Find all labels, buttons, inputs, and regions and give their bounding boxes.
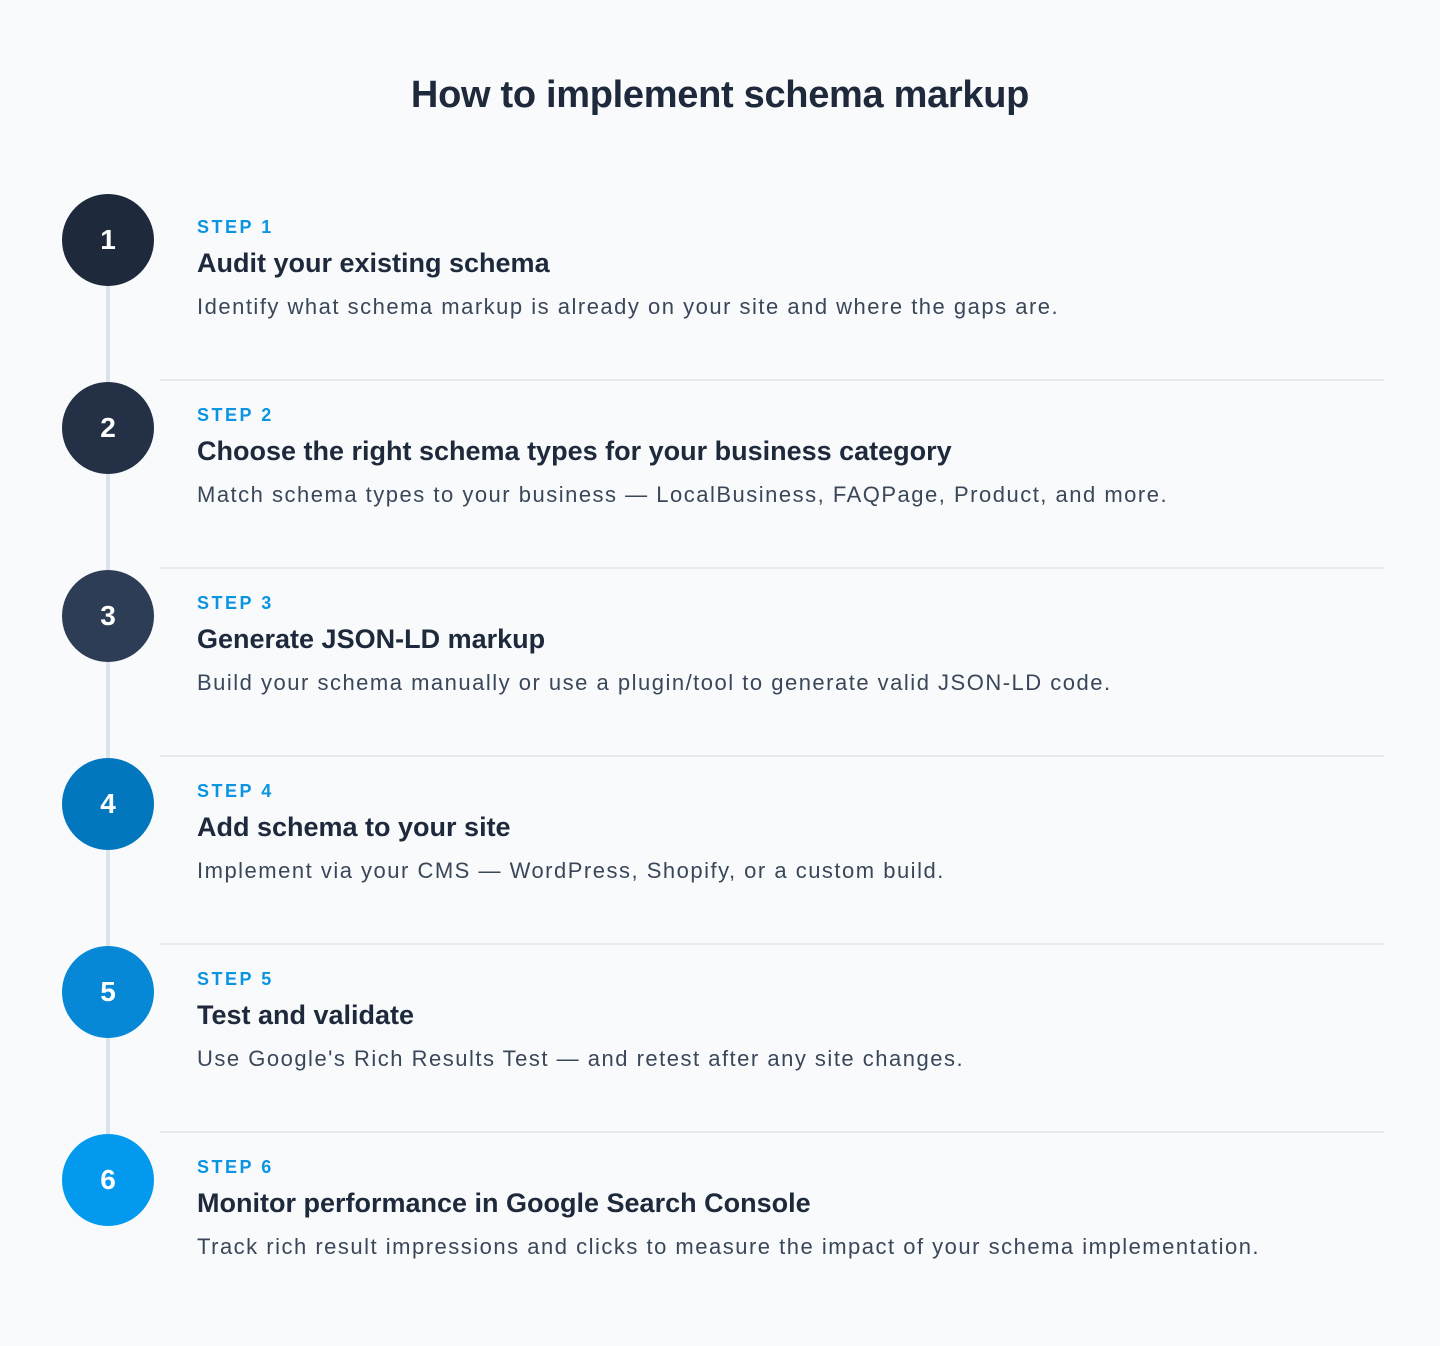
step 5 text: Test and validate (197, 1000, 414, 1030)
step 2 text (197, 405, 1168, 507)
circle 6: 6 (100, 1164, 116, 1195)
step 1 text: Identify what schema markup is already on your site and where the gaps are. (197, 294, 1059, 319)
step 2 text: Choose the right schema types for your business category (197, 436, 952, 466)
circle 4 (62, 758, 154, 850)
circle 2 (62, 382, 154, 474)
step 5 text: Use Google's Rich Results Test — and retest after any site changes. (197, 1046, 964, 1071)
circle 2: 2 (100, 412, 116, 443)
title: How to implement schema markup (411, 74, 1029, 116)
step 2 text: Match schema types to your business — LocalBusiness, FAQPage, Product, and more. (197, 482, 1168, 507)
step 6 text: Track rich result impressions and clicks to measure the impact of your schema implementation. (197, 1234, 1260, 1259)
circle 1: 1 (100, 224, 116, 255)
step 6 text (197, 1157, 1260, 1259)
step 4 text: Implement via your CMS — WordPress, Shopify, or a custom build. (197, 858, 945, 883)
step 3 text (197, 593, 1112, 695)
step 5 text: STEP 5 (197, 969, 274, 989)
step 4 text (197, 781, 945, 883)
step 1 text (197, 217, 1059, 319)
circle 5 (62, 946, 154, 1038)
step 3 text: STEP 3 (197, 593, 274, 613)
circle 3 (62, 570, 154, 662)
step 5 text (197, 969, 964, 1071)
circle 6 (62, 1134, 154, 1226)
step 4 text: Add schema to your site (197, 812, 511, 842)
circle 1 (62, 194, 154, 286)
step 1 text: STEP 1 (197, 217, 274, 237)
step 6 text: Monitor performance in Google Search Console (197, 1188, 811, 1218)
step 1 text: Audit your existing schema (197, 248, 550, 278)
step 3 text: Build your schema manually or use a plugin/tool to generate valid JSON-LD code. (197, 670, 1112, 695)
step 2 text: STEP 2 (197, 405, 274, 425)
step 6 text: STEP 6 (197, 1157, 274, 1177)
circle 5: 5 (100, 976, 116, 1007)
circle 3: 3 (100, 600, 116, 631)
step 4 text: STEP 4 (197, 781, 274, 801)
step 3 text: Generate JSON-LD markup (197, 624, 545, 654)
circle 4: 4 (100, 788, 116, 819)
